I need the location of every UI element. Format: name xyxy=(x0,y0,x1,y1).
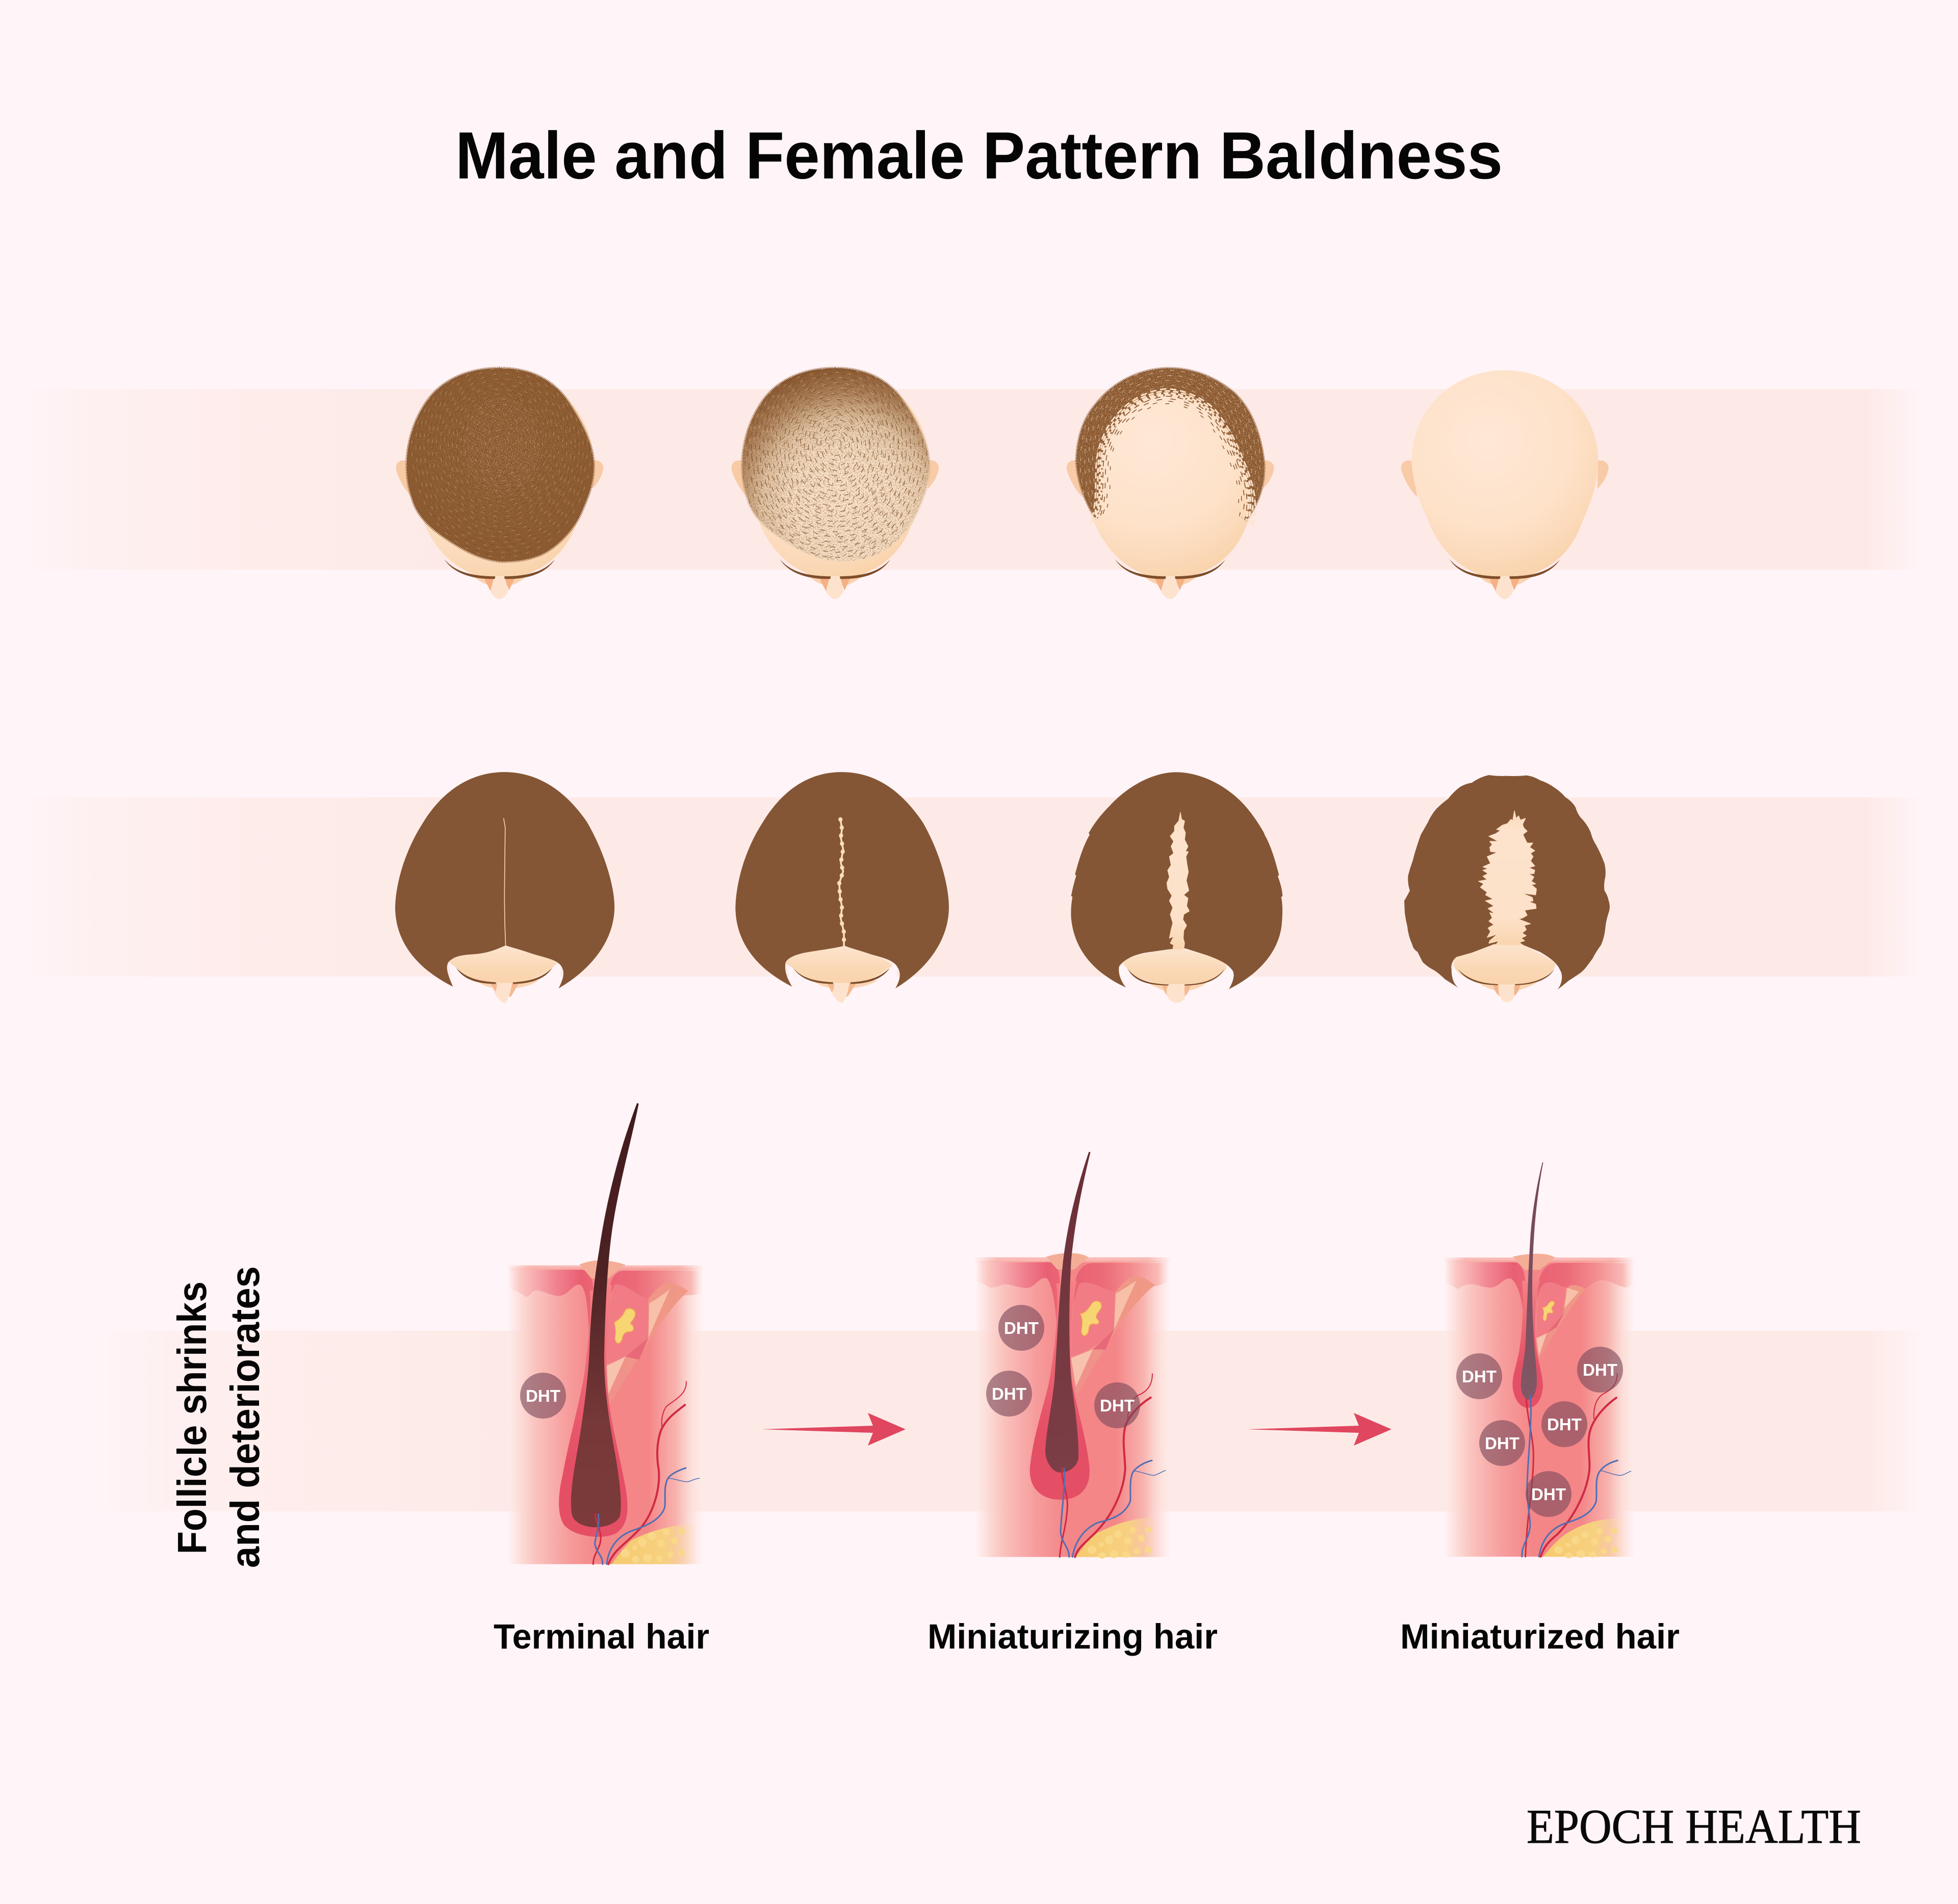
DHT badge xyxy=(1526,1471,1571,1517)
DHT badge xyxy=(520,1373,566,1419)
follicle: miniaturizing hair xyxy=(974,1152,1171,1559)
label: miniaturized hair: Miniaturized hair xyxy=(1400,1617,1680,1656)
DHT badge: DHT xyxy=(1100,1396,1135,1415)
male head: full hair xyxy=(396,367,604,599)
DHT badge: DHT xyxy=(1583,1360,1617,1379)
female heads row xyxy=(395,772,1610,1003)
label: terminal hair: Terminal hair xyxy=(494,1617,709,1656)
band: follicle row xyxy=(97,1331,1922,1511)
arrow: to miniaturizing xyxy=(762,1413,906,1446)
vertical label: follicle shrinks: and deteriorates xyxy=(222,1266,268,1568)
arrow: to miniaturized xyxy=(1247,1413,1392,1446)
vertical label: follicle shrinks: Follicle shrinks xyxy=(169,1281,215,1554)
female head: widening part xyxy=(735,772,949,1003)
DHT badge: DHT xyxy=(1462,1367,1497,1386)
male head: thinning hair xyxy=(731,367,939,599)
DHT badge: DHT xyxy=(1547,1415,1582,1434)
female head: advanced thinning xyxy=(1404,775,1610,1002)
DHT badge: DHT xyxy=(1004,1319,1039,1337)
follicle: miniaturized hair xyxy=(1443,1162,1635,1558)
female head: full hair with thin part xyxy=(395,772,614,1003)
skin cross-section xyxy=(506,1103,704,1564)
DHT badge: DHT xyxy=(1485,1434,1519,1453)
vertical label: follicle shrinks xyxy=(169,1266,268,1568)
logo: Epoch Health: EPOCH HEALTH xyxy=(1527,1799,1861,1854)
DHT badge xyxy=(1479,1420,1525,1466)
DHT badge xyxy=(1541,1401,1587,1447)
skin cross-section xyxy=(974,1152,1171,1559)
DHT badge xyxy=(1094,1382,1140,1428)
band: female row xyxy=(20,797,1922,976)
title: Male and Female Pattern Baldness xyxy=(455,118,1503,193)
female head: wide part xyxy=(1071,772,1282,1003)
DHT badge xyxy=(986,1371,1032,1417)
DHT badge: DHT xyxy=(992,1384,1026,1403)
DHT badge: DHT xyxy=(1531,1485,1566,1504)
DHT badge xyxy=(1577,1347,1623,1393)
label: miniaturizing hair: Miniaturizing hair xyxy=(928,1617,1218,1656)
skin cross-section xyxy=(1443,1162,1635,1558)
DHT badge xyxy=(998,1305,1044,1351)
follicle: terminal hair xyxy=(506,1103,704,1564)
male head: receding crown xyxy=(1067,350,1274,599)
male heads row xyxy=(396,367,1609,599)
DHT badge xyxy=(1456,1353,1502,1399)
male head: bald xyxy=(1401,370,1609,599)
band: male row xyxy=(20,389,1922,570)
DHT badge: DHT xyxy=(526,1386,560,1405)
